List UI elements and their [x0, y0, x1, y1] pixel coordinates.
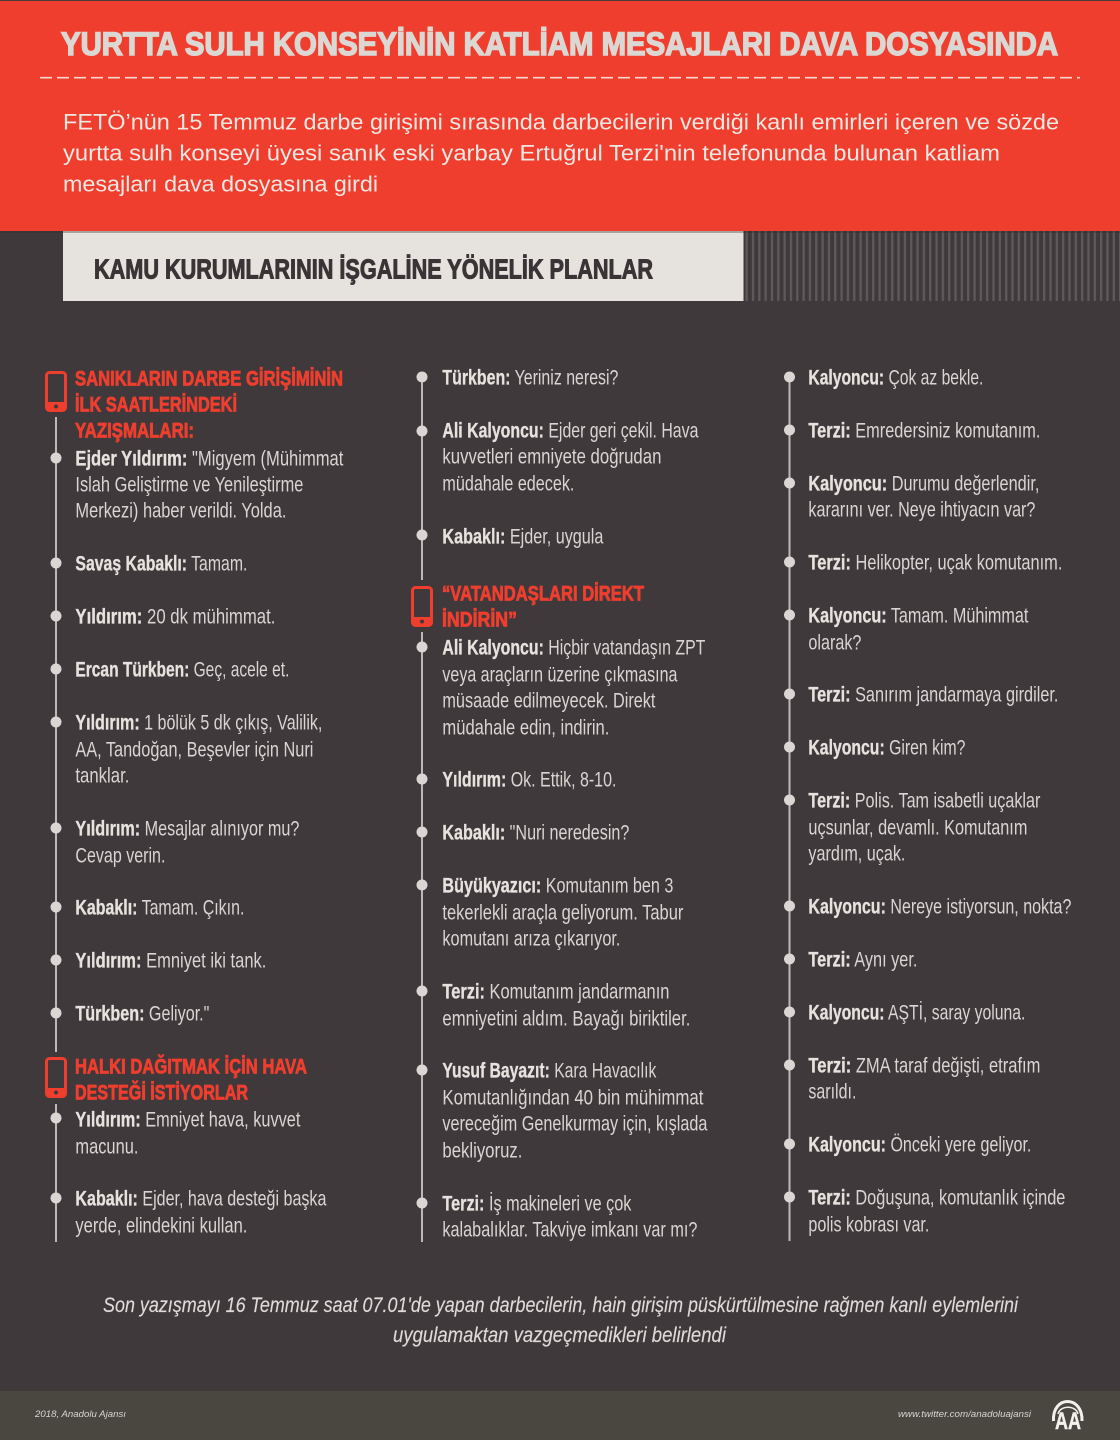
- message: Terzi emredersiniz: Terzi: Emredersiniz komutanım.: [808, 420, 1040, 443]
- title: YURTTA SULH KONSEYİNİN KATLİAM MESAJLARI DAVA DOSYASINDA: [61, 26, 1058, 62]
- message: Terzi ZMA: sarıldı.: [808, 1081, 856, 1104]
- message: Terzi sanırım: Terzi: Sanırım jandarmaya girdiler.: [808, 684, 1058, 707]
- icon: AA logo: AA: [1055, 1408, 1081, 1435]
- message: Ali Kalyoncu ejder: [416, 420, 699, 496]
- message: Yıldırım mesajlar: Cevap verin.: [75, 845, 165, 868]
- heading: shoot down citizens: “VATANDAŞLARI DİREKT: [442, 582, 644, 605]
- heading: first hours messages: İLK SAATLERİNDEKİ: [75, 393, 237, 416]
- message: Kalyoncu çok az: Kalyoncu: Çok az bekle.: [808, 367, 983, 390]
- closing statement: [103, 1294, 1019, 1347]
- message: Ercan Türkben: Ercan Türkben: Geç, acele et.: [75, 659, 289, 682]
- message: Kabaklı hava desteği: yerde, elindekini kullan.: [75, 1215, 247, 1238]
- message: Yusuf Bayazıt: vereceğim Genelkurmay için, kışlada: [442, 1113, 708, 1136]
- message: Yıldırım hava: macunu.: [75, 1136, 138, 1159]
- message: Kalyoncu durumu: [784, 473, 1039, 522]
- intro text: FETÖ’nün 15 Temmuz darbe girişimi sırasında darbecilerin verdiği kanlı emirleri içeren ve sözde: [63, 110, 1059, 134]
- message: Terzi ZMA: [784, 1055, 1040, 1104]
- message: Büyükyazıcı: tekerlekli araçla geliyorum. Tabur: [442, 902, 683, 925]
- message: Kalyoncu tamam: olarak?: [808, 632, 861, 655]
- message: Terzi polis: [784, 790, 1040, 866]
- message: Yıldırım hava: [50, 1109, 301, 1159]
- message: Yıldırım ok: Yıldırım: Ok. Ettik, 8-10.: [442, 769, 616, 792]
- message: Yıldırım emniyet: Yıldırım: Emniyet iki tank.: [75, 950, 266, 973]
- column 2: [412, 367, 708, 1242]
- message: Ali Kalyoncu ejder: Ali Kalyoncu: Ejder geri çekil. Hava: [442, 420, 699, 443]
- message: Kalyoncu AŞTİ: Kalyoncu: AŞTİ, saray yoluna.: [808, 1002, 1025, 1025]
- intro text: mesajları dava dosyasına girdi: [63, 172, 378, 197]
- intro text: [63, 110, 1059, 197]
- message: Terzi helikopter: Terzi: Helikopter, uçak komutanım.: [808, 552, 1062, 575]
- heading: air support: DESTEĞİ İSTİYORLAR: [75, 1080, 248, 1104]
- message: Terzi polis: uçsunlar, devamlı. Komutanım: [808, 817, 1027, 840]
- heading: first hours messages: YAZIŞMALARI:: [75, 419, 194, 442]
- message: Ali Kalyoncu hiçbir: müsaade edilmeyecek. Direkt: [442, 690, 656, 713]
- message: Kalyoncu önceki: Kalyoncu: Önceki yere geliyor.: [808, 1134, 1031, 1157]
- message: Terzi doğuşuna: [784, 1187, 1065, 1237]
- message: Ali Kalyoncu hiçbir: Ali Kalyoncu: Hiçbir vatandaşın ZPT: [442, 637, 706, 660]
- message: Terzi polis: Terzi: Polis. Tam isabetli uçaklar: [808, 790, 1040, 813]
- message: Ali Kalyoncu hiçbir: müdahale edin, indirin.: [442, 717, 609, 740]
- message: Ejder Yıldırım: Merkezi) haber verildi. Yolda.: [75, 500, 286, 523]
- message: Savaş Kabaklı: Savaş Kabaklı: Tamam.: [75, 553, 247, 576]
- message: Kabaklı tamam: Kabaklı: Tamam. Çıkın.: [75, 897, 244, 920]
- message: Türkben yeriniz: Türkben: Yeriniz neresi?: [442, 367, 618, 390]
- message: Yıldırım 1 bölük: [50, 712, 322, 788]
- message: Ejder Yıldırım: Ejder Yıldırım: "Migyem (Mühimmat: [75, 448, 344, 471]
- message: Kalyoncu nereye: Kalyoncu: Nereye istiyorsun, nokta?: [808, 896, 1071, 919]
- message: Türkben geliyor: Türkben: Geliyor.": [75, 1003, 209, 1026]
- message: Terzi iş makineleri: Terzi: İş makineleri ve çok: [442, 1193, 632, 1216]
- message: Terzi polis: yardım, uçak.: [808, 843, 905, 866]
- message: Terzi iş makineleri: [416, 1193, 697, 1242]
- message: Kalyoncu tamam: [784, 605, 1029, 655]
- footer: [0, 1391, 1120, 1440]
- section heading text: KAMU KURUMLARININ İŞGALİNE YÖNELİK PLANLAR: [94, 254, 653, 284]
- message: Kabaklı Nuri: Kabaklı: "Nuri neredesin?: [442, 822, 629, 845]
- message: Ali Kalyoncu hiçbir: veya araçların üzerine çıkmasına: [442, 664, 678, 687]
- message: Yusuf Bayazıt: Yusuf Bayazıt: Kara Havacılık: [442, 1060, 657, 1083]
- message: Yusuf Bayazıt: Komutanlığından 40 bin mühimmat: [442, 1087, 704, 1110]
- message: Büyükyazıcı: komutanı arıza çıkarıyor.: [442, 928, 620, 951]
- message: Kalyoncu durumu: Kalyoncu: Durumu değerlendir,: [808, 473, 1039, 496]
- icon: AA logo: [1053, 1402, 1082, 1435]
- closing statement: uygulamaktan vazgeçmedikleri belirlendi: [393, 1324, 727, 1347]
- message: Terzi jandarma: Terzi: Komutanım jandarmanın: [442, 981, 669, 1004]
- message: Büyükyazıcı: [416, 875, 683, 951]
- message: Terzi jandarma: [416, 981, 690, 1031]
- message: Ejder Yıldırım: Islah Geliştirme ve Yenileştirme: [75, 474, 303, 497]
- message: Ali Kalyoncu ejder: müdahale edecek.: [442, 473, 574, 496]
- panel: red header: [0, 0, 1120, 231]
- message: Terzi iş makineleri: kalabalıklar. Takviye imkanı var mı?: [442, 1219, 697, 1242]
- message: Terzi doğuşuna: Terzi: Doğuşuna, komutanlık içinde: [808, 1187, 1065, 1210]
- message: Yıldırım mesajlar: [50, 818, 299, 868]
- message: Ejder Yıldırım: [50, 448, 344, 523]
- message: Kabaklı uygula: Kabaklı: Ejder, uygula: [442, 526, 604, 549]
- column 3: [784, 367, 1071, 1241]
- panel: section heading: [63, 231, 744, 301]
- footer url: www.twitter.com/anadoluajansi: [898, 1409, 1032, 1420]
- heading: first hours messages: [75, 367, 343, 442]
- message: Kalyoncu durumu: kararını ver. Neye ihtiyacın var?: [808, 499, 1035, 522]
- message: Yusuf Bayazıt: [416, 1060, 708, 1163]
- heading: air support: HALKI DAĞITMAK İÇİN HAVA: [75, 1054, 307, 1078]
- footer credit: 2018, Anadolu Ajansı: [34, 1409, 126, 1420]
- message: Kabaklı hava desteği: Kabaklı: Ejder, hava desteği başka: [75, 1188, 327, 1211]
- message: Yusuf Bayazıt: bekliyoruz.: [442, 1140, 522, 1163]
- message: Terzi ZMA: Terzi: ZMA taraf değişti, etrafım: [808, 1055, 1040, 1078]
- message: Kalyoncu giren: Kalyoncu: Giren kim?: [808, 737, 965, 760]
- message: Terzi jandarma: emniyetini aldım. Bayağı biriktiler.: [442, 1008, 690, 1031]
- heading: shoot down citizens: İNDİRİN”: [442, 608, 517, 631]
- message: Ali Kalyoncu ejder: kuvvetleri emniyete doğrudan: [442, 446, 661, 469]
- intro text: yurtta sulh konseyi üyesi sanık eski yarbay Ertuğrul Terzi'nin telefonunda bulunan katliam: [63, 141, 1000, 166]
- message: Kalyoncu tamam: Kalyoncu: Tamam. Mühimmat: [808, 605, 1029, 628]
- icon: phone: [412, 588, 432, 626]
- heading: first hours messages: SANIKLARIN DARBE GİRİŞİMİNİN: [75, 367, 343, 390]
- message: Kabaklı hava desteği: [50, 1188, 327, 1238]
- message: Yıldırım 20 dk: Yıldırım: 20 dk mühimmat.: [75, 606, 275, 629]
- message: Yıldırım hava: Yıldırım: Emniyet hava, kuvvet: [75, 1109, 301, 1132]
- message: Yıldırım 1 bölük: AA, Tandoğan, Beşevler için Nuri: [75, 739, 313, 762]
- message: Terzi aynı yer: Terzi: Aynı yer.: [808, 949, 917, 972]
- message: Büyükyazıcı: Büyükyazıcı: Komutanım ben 3: [442, 875, 673, 898]
- icon: phone: [46, 1058, 66, 1097]
- message: Yıldırım 1 bölük: Yıldırım: 1 bölük 5 dk çıkış, Valilik,: [75, 712, 322, 735]
- heading: air support: [75, 1054, 307, 1104]
- message: Yıldırım 1 bölük: tanklar.: [75, 765, 129, 788]
- icon: phone: [46, 372, 66, 411]
- message: Terzi doğuşuna: polis kobrası var.: [808, 1214, 929, 1237]
- message: Yıldırım mesajlar: Yıldırım: Mesajlar alınıyor mu?: [75, 818, 299, 841]
- heading: shoot down citizens: [442, 582, 644, 631]
- message: Ali Kalyoncu hiçbir: [416, 637, 706, 740]
- column 1: [46, 367, 344, 1242]
